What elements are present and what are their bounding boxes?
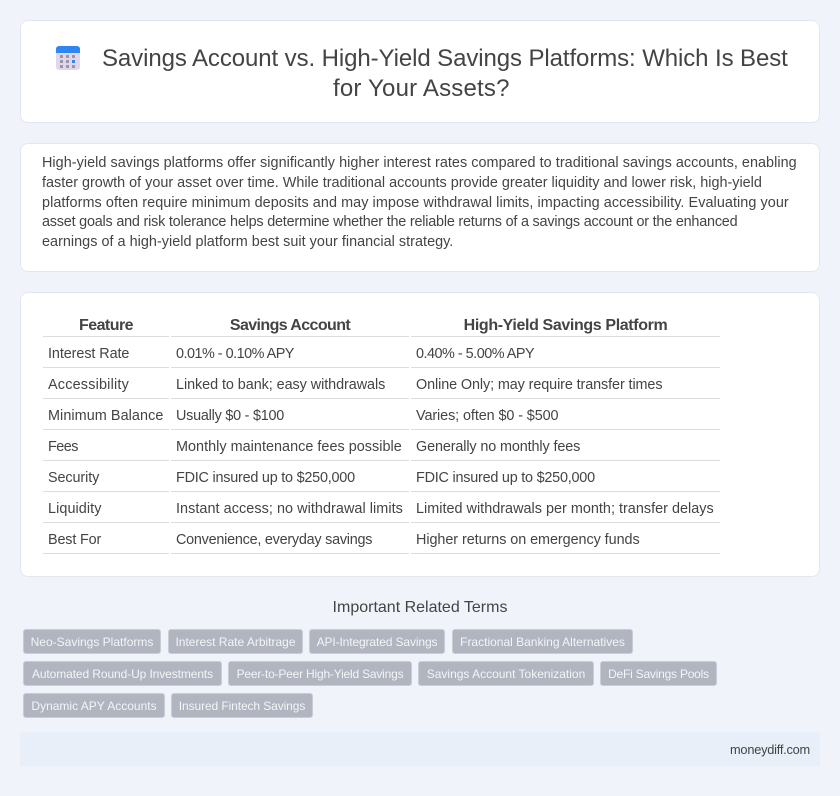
tag: [600, 661, 717, 686]
tag: Automated Round-Up Investments: [32, 667, 213, 681]
tag: Fractional Banking Alternatives: [460, 635, 625, 649]
tag: [168, 629, 303, 654]
tag: [23, 629, 161, 654]
header: savings account: Savings Account: [230, 317, 350, 334]
intro text: earnings of a high-yield platform best suit your financial strategy.: [42, 234, 453, 250]
tag: [452, 629, 633, 654]
row: interest rate: Interest Rate: [48, 346, 129, 362]
row: best for: Convenience, everyday savings: [176, 532, 372, 548]
tag: Peer-to-Peer High-Yield Savings: [237, 667, 403, 681]
row: security: Security: [48, 470, 99, 486]
tag: [309, 629, 445, 654]
row: minimum balance: Varies; often $0 - $500: [416, 408, 558, 424]
tag: Savings Account Tokenization: [427, 667, 585, 681]
comparison table panel: [20, 292, 820, 577]
row: liquidity: Limited withdrawals per month; transfer delays: [416, 501, 714, 517]
row: accessibility: Accessibility: [48, 377, 129, 393]
related terms heading: Important Related Terms: [333, 599, 507, 616]
footer bar: [20, 732, 820, 766]
tag: API-Integrated Savings: [317, 635, 437, 649]
tag: Insured Fintech Savings: [179, 699, 305, 713]
intro text: [42, 155, 797, 250]
header: high-yield: High-Yield Savings Platform: [464, 317, 667, 334]
tag: Interest Rate Arbitrage: [175, 635, 296, 649]
row: best for: Best For: [48, 532, 101, 548]
row: security: FDIC insured up to $250,000: [416, 470, 595, 486]
tag: Dynamic APY Accounts: [31, 699, 157, 713]
tag: [23, 661, 222, 686]
intro text: High-yield savings platforms offer significantly higher interest rates compared to traditional savings accounts, enabling: [42, 155, 797, 171]
intro text: platforms often require minimum deposits and may impose withdrawal limits, impacting accessibility. Evaluating your: [42, 195, 789, 211]
tag: [228, 661, 412, 686]
title: for Your Assets?: [333, 75, 510, 102]
row: minimum balance: [48, 408, 558, 424]
row: fees: Monthly maintenance fees possible: [176, 439, 402, 455]
tag: DeFi Savings Pools: [608, 667, 709, 681]
header: feature: Feature: [79, 317, 133, 334]
row: fees: Fees: [48, 439, 78, 455]
row: minimum balance: Minimum Balance: [48, 408, 163, 424]
row: liquidity: Liquidity: [48, 501, 102, 517]
row: security: [48, 470, 595, 486]
tag: [418, 661, 594, 686]
table: [43, 317, 720, 554]
tag: [23, 693, 165, 718]
row: security: FDIC insured up to $250,000: [176, 470, 355, 486]
row: interest rate: 0.40% - 5.00% APY: [416, 346, 534, 362]
icon: calendar: [56, 46, 80, 70]
intro panel: [20, 143, 820, 272]
row: fees: Generally no monthly fees: [416, 439, 580, 455]
title: Savings Account vs. High-Yield Savings Platforms: Which Is Best: [102, 45, 788, 72]
row: interest rate: [48, 346, 534, 362]
row: best for: [48, 532, 640, 548]
intro text: faster growth of your asset over time. While traditional accounts provide greater liquidity and lower risk, high-yield: [42, 175, 762, 191]
title: [102, 45, 788, 102]
row: best for: Higher returns on emergency funds: [416, 532, 640, 548]
row: accessibility: Online Only; may require transfer times: [416, 377, 662, 393]
row: accessibility: Linked to bank; easy withdrawals: [176, 377, 385, 393]
row: liquidity: Instant access; no withdrawal limits: [176, 501, 403, 517]
row: interest rate: 0.01% - 0.10% APY: [176, 346, 294, 362]
row: fees: [48, 439, 580, 455]
row: accessibility: [48, 377, 662, 393]
header panel: [20, 20, 820, 123]
row: minimum balance: Usually $0 - $100: [176, 408, 284, 424]
footer text: moneydiff.com: [730, 742, 810, 757]
tag: [171, 693, 313, 718]
row: liquidity: [48, 501, 714, 517]
intro text: asset goals and risk tolerance helps determine whether the reliable returns of a savings account or the enhanced: [42, 214, 737, 230]
tag: Neo-Savings Platforms: [31, 635, 153, 649]
